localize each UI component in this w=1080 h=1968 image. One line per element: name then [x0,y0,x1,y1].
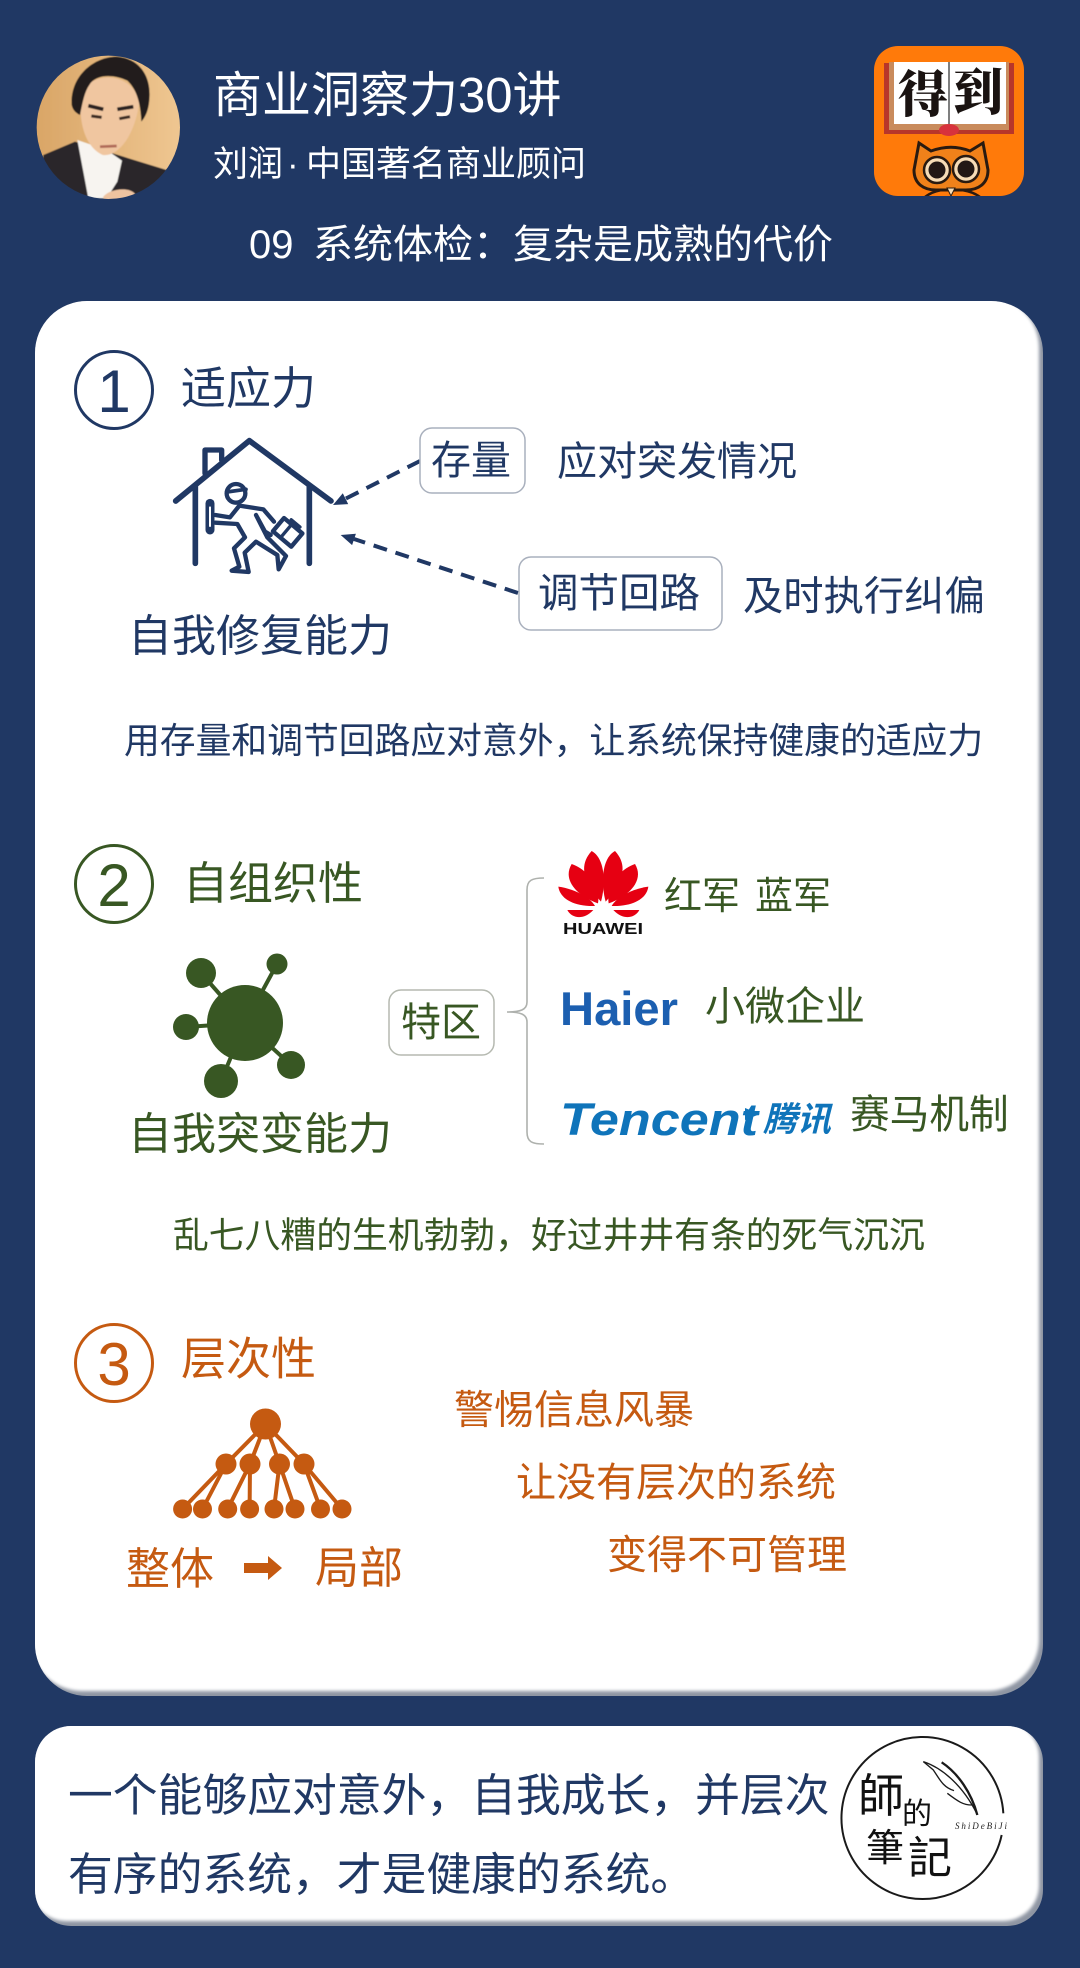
box: feedback loop [519,557,722,630]
section 3: hierarchy [76,1324,847,1594]
brace [507,878,544,1144]
conclusion line 2: 有序的系统，才是健康的系统。 [68,1850,695,1900]
text: caution line 3: 变得不可管理 [607,1534,847,1578]
stamp: teacher's notes: ShiDeBiJi [955,1821,1007,1831]
icon: owl [914,143,988,197]
icon: Dedao app logo [874,46,1024,197]
text: micro enterprises: 小微企业 [705,985,865,1029]
text: caution line 2: 让没有层次的系统 [516,1461,836,1505]
label: whole: 整体 [126,1545,214,1594]
logo: Haier: Haier [560,982,678,1035]
box: stock [420,428,525,493]
label: part: 局部 [315,1544,403,1593]
panel: conclusion card [30,1721,1043,1926]
lesson heading: 09 [249,223,294,267]
arrow: stock to repair [333,461,420,505]
logo: Tencent: 腾讯 [763,1092,833,1141]
arrow: whole to part [244,1556,282,1580]
heading: adaptability: 适应力 [181,363,316,414]
logo: Tencent: Tencent [560,1094,760,1145]
text: red and blue armies: 红军 [664,876,740,918]
stamp: teacher's notes: 的 [902,1789,932,1833]
logo: Huawei: HUAWEI [563,921,643,938]
number badge 3: 3 [97,1331,131,1398]
lesson heading: 系统体检：复杂是成熟的代价 [313,223,833,267]
header [33,46,1024,267]
icon: logo characters: 到 [953,53,1003,125]
subtitle: · [287,145,299,184]
number badge 1 [76,352,152,428]
section 2: self organization [76,846,1009,1256]
text: stock purpose: 应对突发情况 [557,440,797,484]
stamp: teacher's notes: 筆 [866,1817,904,1872]
number badge 2: 2 [97,852,131,919]
text: caution line 1: 警惕信息风暴 [454,1389,694,1433]
icon: logo characters: 得 [898,55,948,127]
number badge 3 [76,1324,152,1402]
arrow: feedback loop to repair [341,534,518,593]
conclusion line 1: 一个能够应对意外，自我成长，并层次 [68,1771,830,1821]
logo: Tencent [560,1092,833,1145]
avatar portrait [33,53,183,203]
icon: hierarchy tree [173,1408,352,1518]
subtitle: 刘润 [213,145,283,184]
heading: self organization: 自组织性 [183,858,363,909]
box: special zone [389,990,494,1055]
label: self mutation: 自我突变能力 [128,1110,392,1159]
text: red and blue armies: 蓝军 [755,876,831,918]
logo: Huawei [558,851,648,938]
summary 1: 用存量和调节回路应对意外，让系统保持健康的适应力 [124,721,983,761]
summary 2: 乱七八糟的生机勃勃，好过井井有条的死气沉沉 [173,1216,925,1256]
heading: hierarchy: 层次性 [181,1334,316,1384]
icon: repairman in house [176,441,331,572]
stamp: teacher's notes [841,1737,1007,1899]
subtitle: 中国著名商业顾问 [306,145,586,184]
number badge 2 [76,846,152,922]
stamp: teacher's notes: 師 [858,1760,904,1826]
section 1: adaptability [76,352,985,761]
icon: molecule [173,954,305,1098]
label: self repair: 自我修复能力 [128,612,392,661]
number badge 1: 1 [97,358,131,425]
text: loop purpose: 及时执行纠偏 [743,574,985,619]
text: horse race mechanism: 赛马机制 [850,1093,1009,1137]
title: 商业洞察力30讲 [213,69,562,123]
box: feedback loop: 调节回路 [538,570,700,616]
panel: main card [30,296,1043,1696]
box: stock: 存量 [431,439,511,483]
box: special zone: 特区 [401,1001,481,1045]
stamp: teacher's notes: 記 [908,1822,952,1886]
